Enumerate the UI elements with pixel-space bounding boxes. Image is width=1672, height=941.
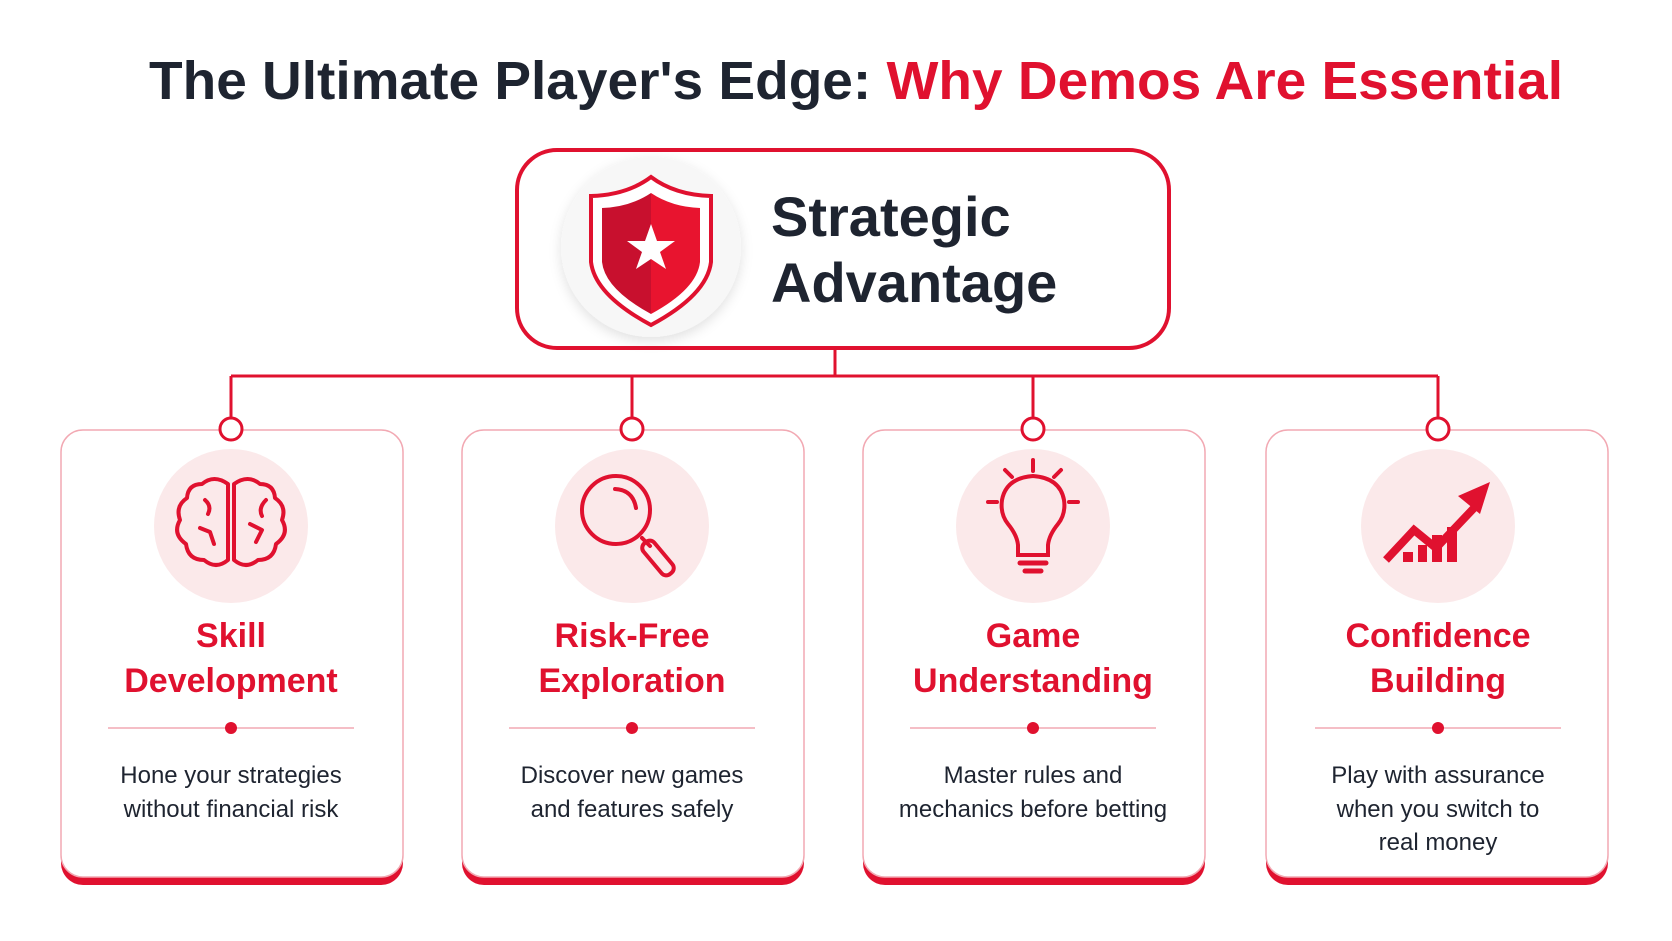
card: skill development: Hone your strategies xyxy=(120,762,342,789)
panel: strategic advantage xyxy=(517,150,1169,348)
card: risk-free exploration: Discover new games xyxy=(521,762,743,789)
card: game understanding: Understanding xyxy=(913,662,1153,700)
title: The Ultimate Player's Edge: Why Demos Are Essential xyxy=(149,51,1563,111)
card: risk-free exploration: Exploration xyxy=(538,662,726,700)
card: confidence building: Confidence xyxy=(1345,617,1531,655)
icon: growth chart xyxy=(1386,482,1490,562)
card: confidence building: Play with assurance xyxy=(1331,762,1545,789)
connectors xyxy=(231,350,1438,419)
icon: brain xyxy=(177,479,285,565)
card: risk-free exploration xyxy=(462,418,804,885)
icon: shield xyxy=(561,157,741,337)
card: skill development: without financial risk xyxy=(123,796,339,823)
icon: light bulb xyxy=(988,460,1078,571)
card: game understanding: mechanics before betting xyxy=(899,796,1167,823)
heading: strategic advantage: Strategic xyxy=(771,185,1011,248)
icon: magnifier xyxy=(582,476,676,578)
card: risk-free exploration: Risk-Free xyxy=(555,617,709,655)
card: game understanding: Master rules and xyxy=(944,762,1122,789)
card: skill development: Skill xyxy=(196,617,266,655)
card: game understanding xyxy=(863,418,1205,885)
card: confidence building: Building xyxy=(1370,662,1506,700)
card: game understanding: Game xyxy=(986,617,1080,655)
card: confidence building: real money xyxy=(1379,829,1497,856)
card: skill development xyxy=(61,418,403,885)
card: confidence building xyxy=(1266,418,1608,885)
card: skill development: Development xyxy=(124,662,338,700)
card: risk-free exploration: and features safely xyxy=(531,796,733,823)
panel: strategic advantage: Advantage xyxy=(771,251,1057,314)
card: confidence building: when you switch to xyxy=(1336,796,1539,823)
